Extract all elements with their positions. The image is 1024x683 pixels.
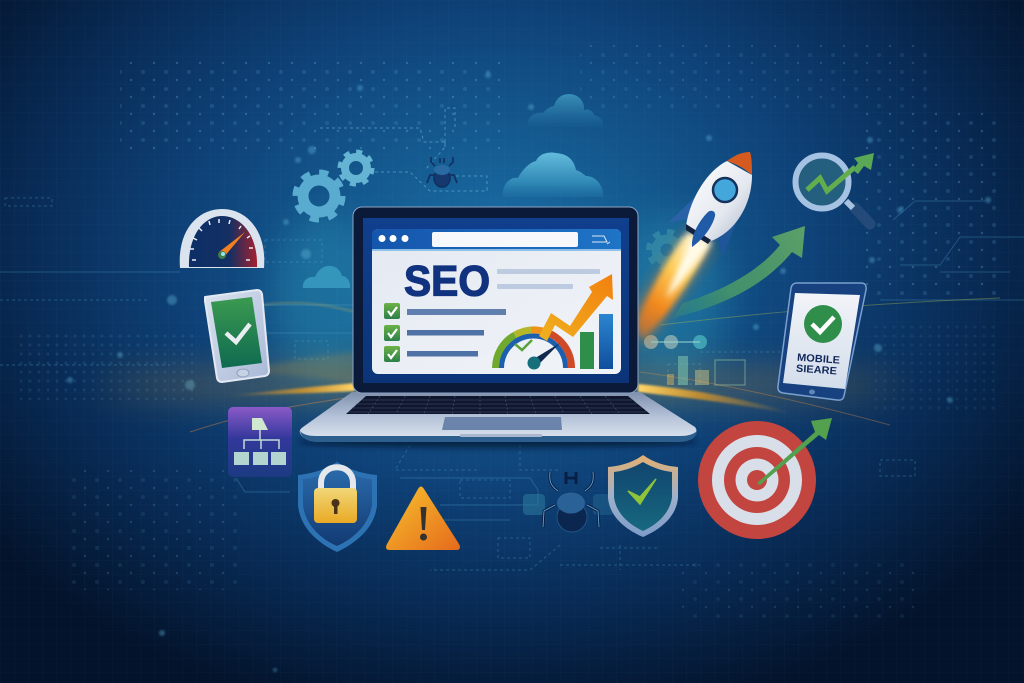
trackpad [442,417,562,430]
laptop base [300,392,696,441]
SEO heading: SEO [404,258,490,306]
tablet label: MOBILE [797,352,840,367]
icon: magnifier with growth arrow [796,153,874,224]
icon: small gear [340,152,372,184]
keyboard [346,396,650,414]
icon: target with arrow [698,418,832,539]
cloud: small left [303,266,350,288]
icon: rocket [668,152,752,257]
icon: speedometer [180,209,264,268]
cloud: top [528,94,603,127]
icon: mobile tablet with check [778,283,866,400]
cloud: middle [503,153,603,197]
icon: large gear [296,173,342,219]
laptop lid [353,207,638,393]
arrow: green growth sweep [673,226,805,318]
icon: sitemap tile [228,407,292,477]
flame: rocket exhaust [632,232,712,345]
glow streaks behind laptop [100,298,1000,432]
icon: phone with check [205,290,269,382]
checklist [384,303,506,362]
gauge [496,330,572,370]
icon: gear behind rocket [649,232,685,268]
icon: lock shield [298,462,377,552]
icon: small spider [427,157,457,187]
browser window [372,229,621,374]
icon: check shield [608,455,678,537]
icon: crawler spider [523,472,614,532]
tablet label: SIEARE [796,363,837,377]
arrow: orange growth [539,274,613,341]
laptop [298,207,698,448]
icon: warning triangle [386,486,460,550]
tablet label [796,352,840,377]
screen background [363,218,629,383]
small bar chart and nodes behind rocket flame [644,335,745,385]
laptop shadow [298,436,698,448]
heading placeholder lines [497,269,600,289]
bars [580,314,613,369]
